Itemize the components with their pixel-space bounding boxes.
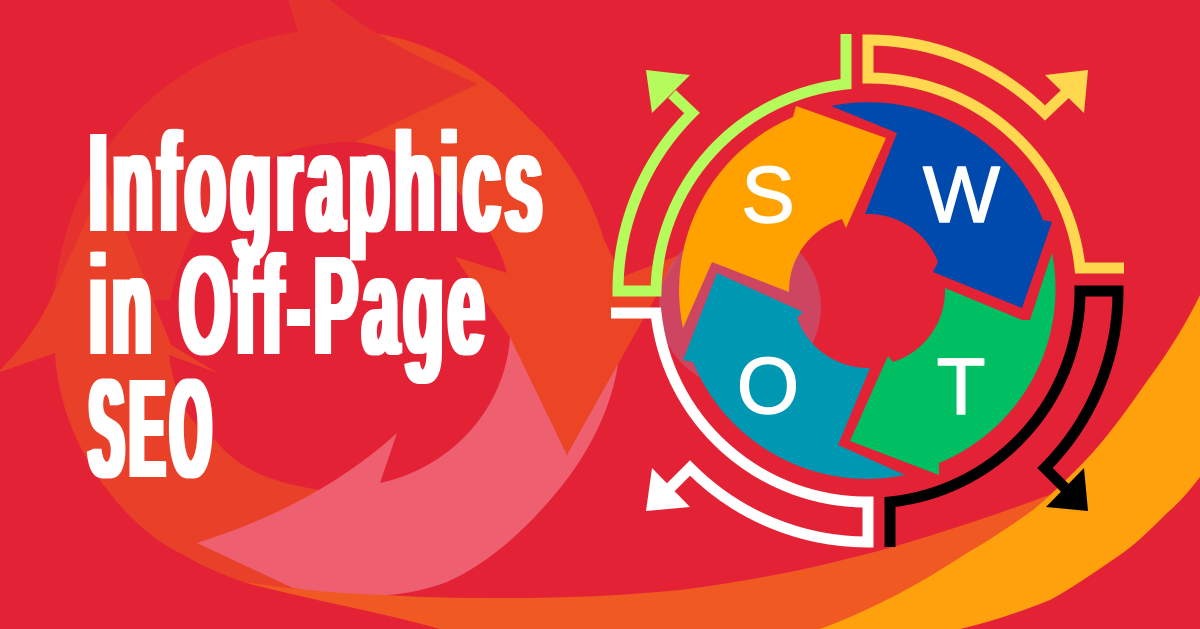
swoosh: amber band	[820, 295, 1200, 629]
segment: T green	[850, 253, 1056, 475]
title: in Off-Page	[89, 226, 489, 384]
SWOT wheel	[679, 102, 1056, 479]
background arrow: right, orange	[340, 30, 679, 455]
outer arrow: yellow	[868, 40, 1124, 268]
segment: S orange: S	[741, 150, 795, 239]
segment: O teal	[683, 273, 905, 479]
background spiral arrows	[0, 0, 679, 595]
background arrow: right arrowhead tip	[455, 220, 679, 455]
outer arrow: light green	[618, 34, 846, 291]
title	[86, 103, 547, 507]
background arrow: top, red-orange	[55, 0, 478, 300]
title: SEO	[89, 349, 217, 507]
outer arrow: black	[890, 291, 1118, 547]
segment: W blue: W	[923, 150, 1000, 239]
translucent circle behind wheel	[659, 226, 821, 388]
swoosh: orange band	[243, 492, 1100, 629]
background arrow: left, orange	[0, 180, 360, 595]
segment: T green: T	[937, 342, 985, 431]
outer arrow: white	[611, 313, 868, 542]
background arrow: bottom, pink	[197, 337, 620, 595]
segment: W blue	[831, 102, 1052, 308]
segment: O teal: O	[737, 341, 799, 430]
segment: S orange	[679, 106, 886, 328]
title: Infographics	[89, 103, 547, 261]
